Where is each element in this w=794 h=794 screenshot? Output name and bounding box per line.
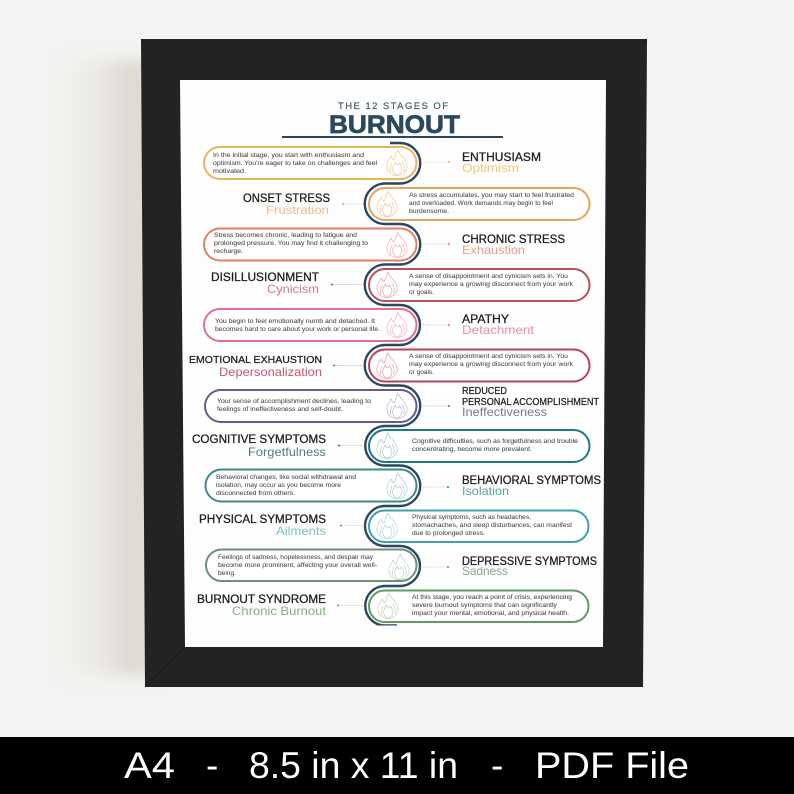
stage 1: enthusiasm	[204, 147, 541, 179]
stage 2: onset stress: Frustration	[266, 203, 329, 217]
stage 11: depressive symptoms: Feelings of sadness, hopelessness, and despair may	[218, 554, 374, 561]
stage 1: enthusiasm: In the initial stage, you start with enthusiasm and	[213, 152, 364, 159]
stage 10: physical symptoms: Physical symptoms, such as headaches,	[412, 514, 531, 521]
stage 12: burnout syndrome: At this stage, you reach a point of crisis, experiencing	[412, 594, 572, 601]
black picture frame	[141, 39, 647, 687]
stage 7: reduced personal accomplishment	[205, 386, 599, 422]
black bottom banner	[0, 737, 794, 794]
stage 11: depressive symptoms: become more prominent, affecting your overall well-	[218, 562, 377, 569]
stage 6: emotional exhaustion: A sense of disappointment and cynicism sets in. You	[409, 353, 568, 360]
stage 12: burnout syndrome: severe burnout symptoms that can significantly	[412, 602, 558, 609]
poster content	[189, 101, 601, 626]
stage 6: emotional exhaustion: or goals.	[409, 369, 434, 376]
banner text: 8.5 in x 11 in	[249, 745, 458, 786]
stage 3: chronic stress: Stress becomes chronic, leading to fatigue and	[214, 232, 357, 239]
stage 11: depressive symptoms: being.	[218, 570, 236, 577]
stage 4: disillusionment: A sense of disappointment and cynicism sets in. You	[409, 273, 568, 280]
stage 3: chronic stress: prolonged pressure. You may find it challenging to	[214, 240, 368, 247]
banner text	[124, 745, 689, 786]
stage 5: apathy	[204, 309, 535, 341]
subtitle: THE 12 STAGES OF	[338, 101, 448, 112]
stage 11: depressive symptoms: DEPRESSIVE SYMPTOMS	[462, 556, 597, 568]
stage 5: apathy: Detachment	[462, 323, 535, 337]
banner text: -	[206, 745, 218, 786]
stage 4: disillusionment: may experience a growing disconnect from your work	[409, 281, 574, 288]
stage 3: chronic stress: CHRONIC STRESS	[462, 234, 565, 246]
stage 5: apathy: You begin to feel emotionally numb and detached. It	[215, 318, 375, 325]
poster sheet	[180, 80, 606, 647]
stage 3: chronic stress: Exhaustion	[462, 243, 525, 257]
stage 8: cognitive symptoms: Cognitive difficulties, such as forgetfulness and trouble	[412, 438, 578, 445]
banner text: A4	[124, 745, 175, 786]
stage 10: physical symptoms: due to prolonged stress.	[412, 530, 485, 537]
stage 3: chronic stress	[204, 228, 565, 260]
stage 2: onset stress: As stress accumulates, you may start to feel frustrated	[409, 192, 574, 199]
stage 6: emotional exhaustion: Depersonalization	[219, 365, 322, 379]
stage 1: enthusiasm: ENTHUSIASM	[462, 152, 541, 164]
stage 12: burnout syndrome: Chronic Burnout	[232, 604, 327, 618]
stage 10: physical symptoms	[199, 510, 588, 542]
banner text: PDF File	[535, 745, 689, 786]
stage 8: cognitive symptoms: Forgetfulness	[248, 445, 326, 459]
stage 4: disillusionment: DISILLUSIONMENT	[211, 272, 319, 284]
stage 2: onset stress: burdensome.	[409, 208, 449, 215]
serpentine connector line	[365, 143, 420, 626]
stage 7: reduced personal accomplishment: Ineffectiveness	[462, 405, 547, 419]
stage 9: behavioral symptoms: disconnected from others.	[216, 490, 295, 497]
frame shadow on wall	[60, 60, 155, 675]
stage 9: behavioral symptoms	[206, 470, 601, 502]
stage 7: reduced personal accomplishment: PERSONAL ACCOMPLISHMENT	[462, 397, 599, 408]
stage 9: behavioral symptoms: Isolation	[462, 484, 509, 498]
stage 6: emotional exhaustion: may experience a growing disconnect from your work	[409, 361, 574, 368]
stage 10: physical symptoms: Ailments	[276, 524, 326, 538]
stage 2: onset stress: ONSET STRESS	[243, 193, 330, 205]
stage 9: behavioral symptoms: Behavioral changes, like social withdrawal and	[216, 474, 356, 481]
stage 5: apathy: becomes hard to care about your work or personal life.	[215, 326, 380, 333]
stage 4: disillusionment: or goals.	[409, 289, 434, 296]
stage 6: emotional exhaustion	[189, 350, 590, 382]
stage 2: onset stress: and overloaded. Work demands may begin to feel	[409, 200, 554, 207]
stage 11: depressive symptoms: Sadness	[462, 564, 508, 578]
stage 7: reduced personal accomplishment: feelings of ineffectiveness and self-doubt.	[217, 406, 343, 413]
stage 4: disillusionment: Cynicism	[267, 282, 319, 296]
stage 10: physical symptoms: PHYSICAL SYMPTOMS	[199, 514, 326, 526]
banner text: -	[491, 745, 503, 786]
main heading: BURNOUT	[329, 111, 460, 139]
stage 12: burnout syndrome: impact your mental, emotional, and physical health.	[412, 610, 569, 617]
stage 7: reduced personal accomplishment: Your sense of accomplishment declines, leading to	[217, 398, 371, 405]
stage 8: cognitive symptoms: concentrating, become more prevalent.	[412, 446, 532, 453]
stage 9: behavioral symptoms: isolation, may occur as you become more	[216, 482, 341, 489]
stage 1: enthusiasm: optimism. You're eager to take on challenges and feel	[213, 160, 378, 167]
stage 12: burnout syndrome	[197, 590, 588, 622]
stage 7: reduced personal accomplishment: REDUCED	[462, 386, 507, 397]
stage 1: enthusiasm: motivated.	[213, 168, 246, 175]
stage 3: chronic stress: recharge.	[214, 248, 243, 255]
title	[282, 101, 503, 139]
stage 4: disillusionment	[211, 269, 590, 301]
stage 6: emotional exhaustion: EMOTIONAL EXHAUSTION	[189, 355, 322, 366]
stage 12: burnout syndrome: BURNOUT SYNDROME	[197, 594, 326, 606]
stage 1: enthusiasm: Optimism	[462, 161, 519, 175]
stage 11: depressive symptoms	[206, 550, 597, 581]
stage 5: apathy: APATHY	[462, 314, 509, 326]
stage 2: onset stress	[243, 188, 590, 220]
stage 8: cognitive symptoms: COGNITIVE SYMPTOMS	[192, 434, 326, 446]
stage 10: physical symptoms: stomachaches, and sleep disturbances, can manifest	[412, 522, 572, 529]
stage 9: behavioral symptoms: BEHAVIORAL SYMPTOMS	[462, 475, 601, 487]
stage 8: cognitive symptoms	[192, 430, 590, 462]
